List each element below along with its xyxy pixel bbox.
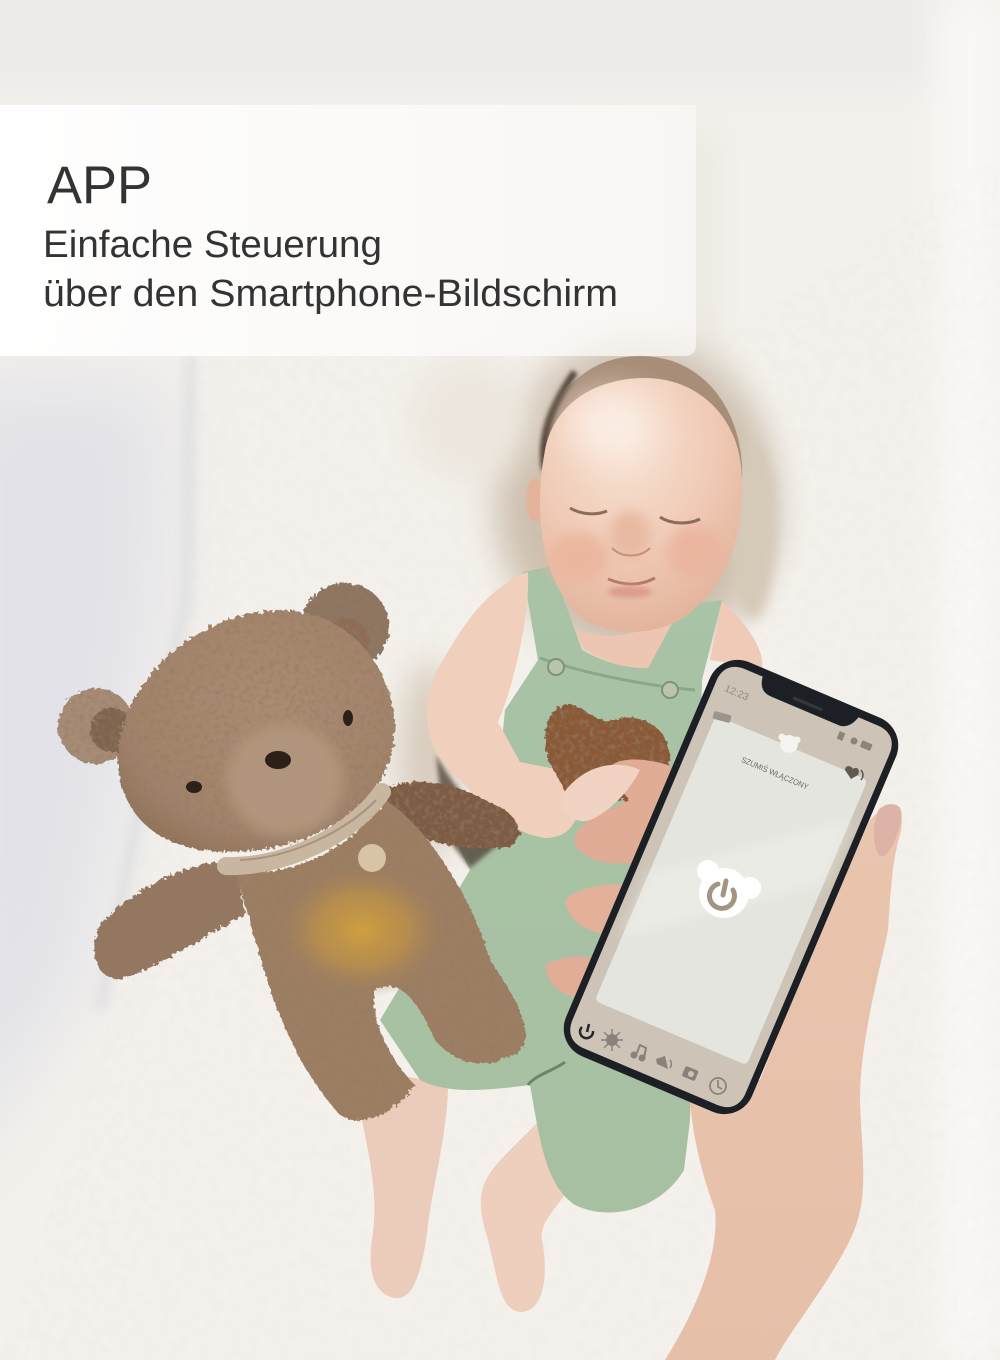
bottom menu icons (580, 1024, 726, 1094)
baby head (526, 356, 742, 632)
bear touch spot (358, 844, 386, 872)
phone screen (564, 661, 898, 1113)
subtitle line one: Einfache Steuerung (43, 224, 382, 266)
thumb nail (874, 804, 901, 856)
plush teddy bear (58, 583, 526, 1120)
bear patch on romper (545, 705, 669, 800)
battery icon (712, 711, 732, 723)
shadow under arm (436, 755, 510, 868)
hand holding phone (546, 760, 902, 1360)
finger three (546, 957, 605, 998)
finger two (565, 884, 640, 935)
baby fingers on hand (561, 765, 640, 821)
power icon (580, 1024, 593, 1038)
finger one (574, 760, 680, 864)
heading panel (0, 105, 696, 356)
clock icon (710, 1078, 726, 1094)
small bear logo (778, 734, 800, 753)
app panel (595, 715, 868, 1065)
bear head (118, 610, 395, 852)
earpiece (792, 696, 823, 712)
speaker icon (656, 1056, 672, 1069)
belly glow (274, 862, 450, 998)
heart sound icon (845, 766, 863, 780)
status icons (837, 731, 873, 751)
green romper (380, 566, 722, 1212)
baby arm and shoulders (427, 572, 762, 838)
bear neck scarf (226, 792, 382, 866)
moon icon (682, 1066, 699, 1081)
bear eyes and nose (186, 710, 353, 793)
status time: 12:23 (723, 683, 750, 704)
palm and thumb (665, 804, 902, 1360)
bear left arm (94, 860, 245, 979)
phone body (554, 651, 908, 1123)
baby legs and feet (362, 1075, 566, 1312)
bear arm right (385, 782, 519, 848)
brightness icon (601, 1029, 623, 1051)
subtitle line two: über den Smartphone-Bildschirm (43, 273, 618, 315)
baby (362, 356, 762, 1312)
screen sheen (621, 754, 851, 1003)
music icon (630, 1045, 646, 1062)
power button bear (697, 860, 761, 918)
bear snout (227, 724, 343, 836)
bear ear left (58, 688, 134, 764)
bear ear right (301, 583, 389, 671)
title: APP (47, 156, 152, 215)
smartphone (554, 651, 908, 1123)
bear body (235, 800, 526, 1120)
status label: SZUMIŚ WŁĄCZONY (740, 755, 810, 792)
